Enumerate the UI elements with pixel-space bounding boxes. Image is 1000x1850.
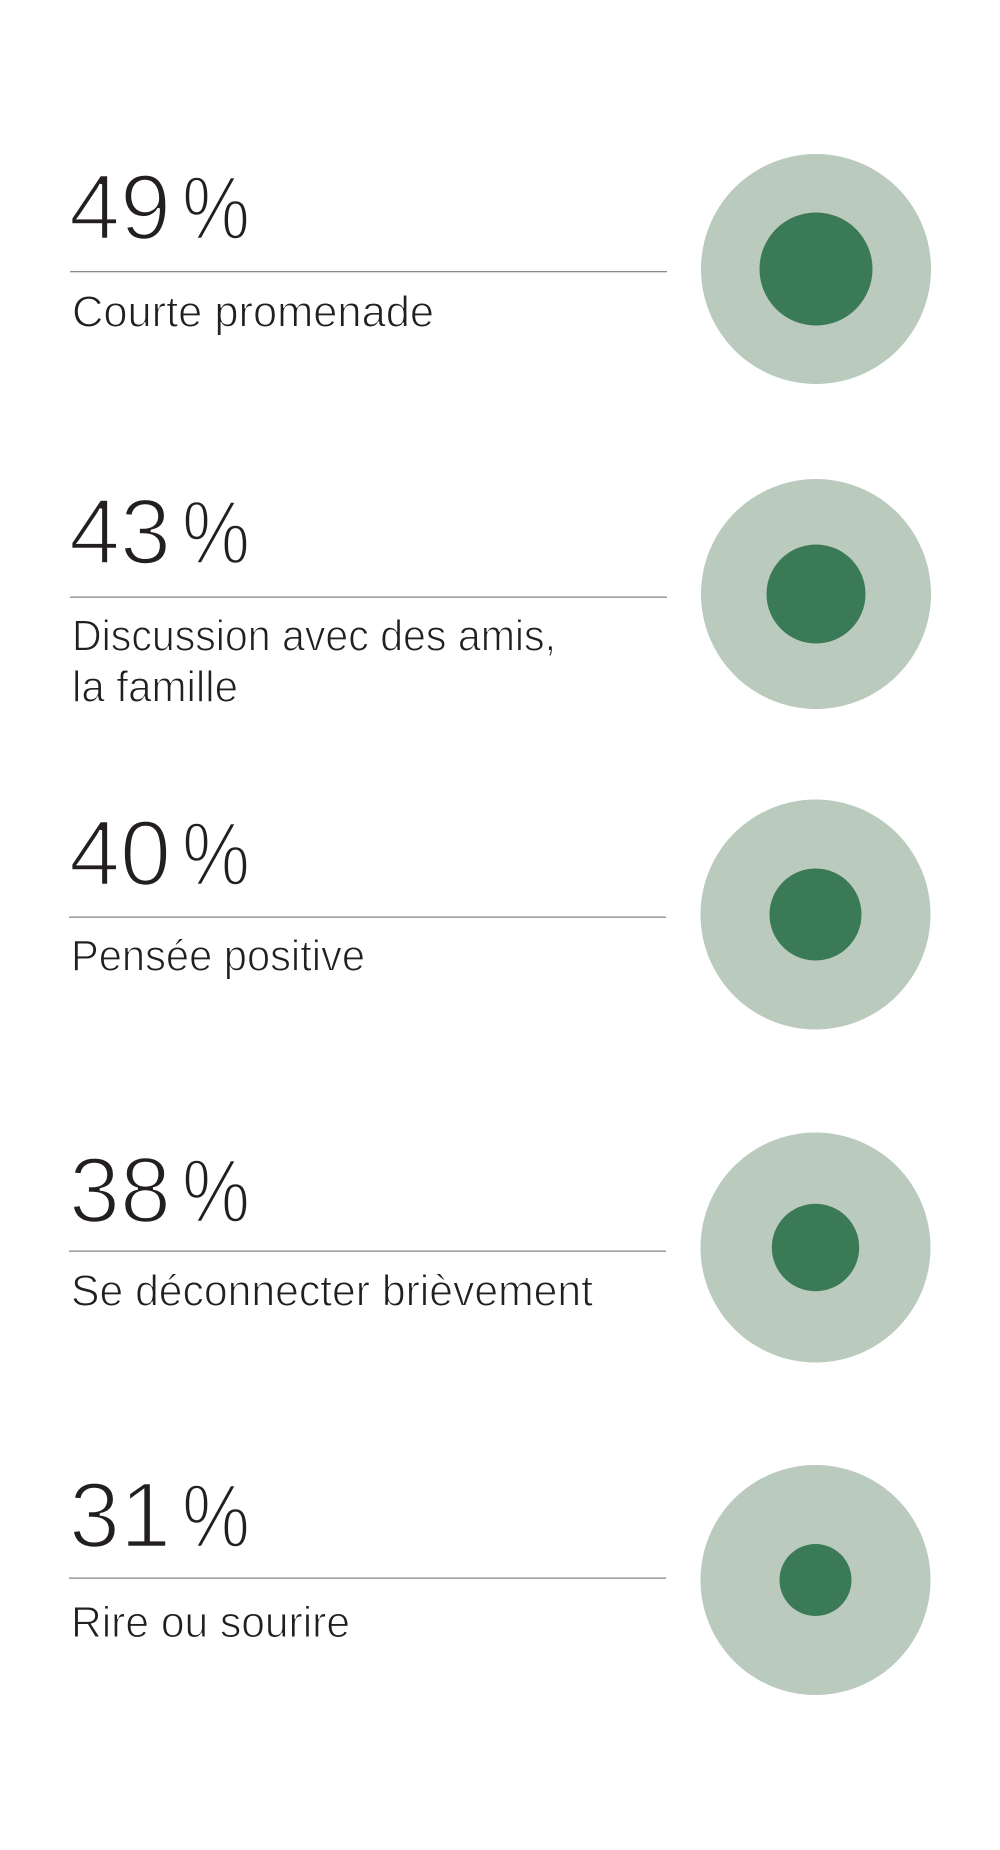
label: Se déconnecter brièvement: Se déconnecter brièvement — [71, 1266, 593, 1316]
value: 49 % — [69, 155, 250, 259]
value: 38 %: 38 — [69, 1138, 171, 1242]
value: 31 %: % — [182, 1467, 250, 1567]
row: 49% Courte promenade — [69, 154, 931, 384]
circle gauge: 38% — [700, 1132, 930, 1362]
value: 38 % — [69, 1138, 250, 1242]
value: 40 %: % — [182, 805, 250, 905]
row: 31% Rire ou sourire — [69, 1463, 930, 1695]
value: 31 %: 31 — [69, 1463, 171, 1567]
circle gauge: 49% — [701, 154, 931, 384]
label: Pensée positive: Pensée positive — [71, 932, 365, 980]
row: 40% Pensée positive — [69, 800, 930, 1030]
circle gauge: 43% — [701, 479, 931, 709]
value: 31 % — [69, 1463, 250, 1567]
row: 43% Discussion — [69, 479, 931, 712]
value: 40 % — [69, 801, 250, 905]
value: 49 %: % — [182, 159, 250, 259]
label: Discussion avec des amis, la famille: Discussion avec des amis, — [72, 612, 556, 660]
label: Discussion avec des amis, la famille: la famille — [72, 662, 238, 712]
value: 49 %: 49 — [69, 155, 171, 259]
circle gauge: 40% — [700, 800, 930, 1030]
value: 43 %: % — [182, 484, 250, 584]
value: 40 %: 40 — [69, 801, 171, 905]
circle gauge: 31% — [700, 1465, 930, 1695]
row: 38% Se déconnecter brièvement — [69, 1132, 930, 1362]
label: Discussion avec des amis, la famille — [72, 612, 556, 712]
label: Rire ou sourire: Rire ou sourire — [71, 1598, 350, 1647]
label: Courte promenade: Courte promenade — [72, 288, 434, 336]
value: 38 %: % — [182, 1142, 250, 1242]
value: 43 % — [69, 480, 250, 584]
value: 43 %: 43 — [69, 480, 171, 584]
